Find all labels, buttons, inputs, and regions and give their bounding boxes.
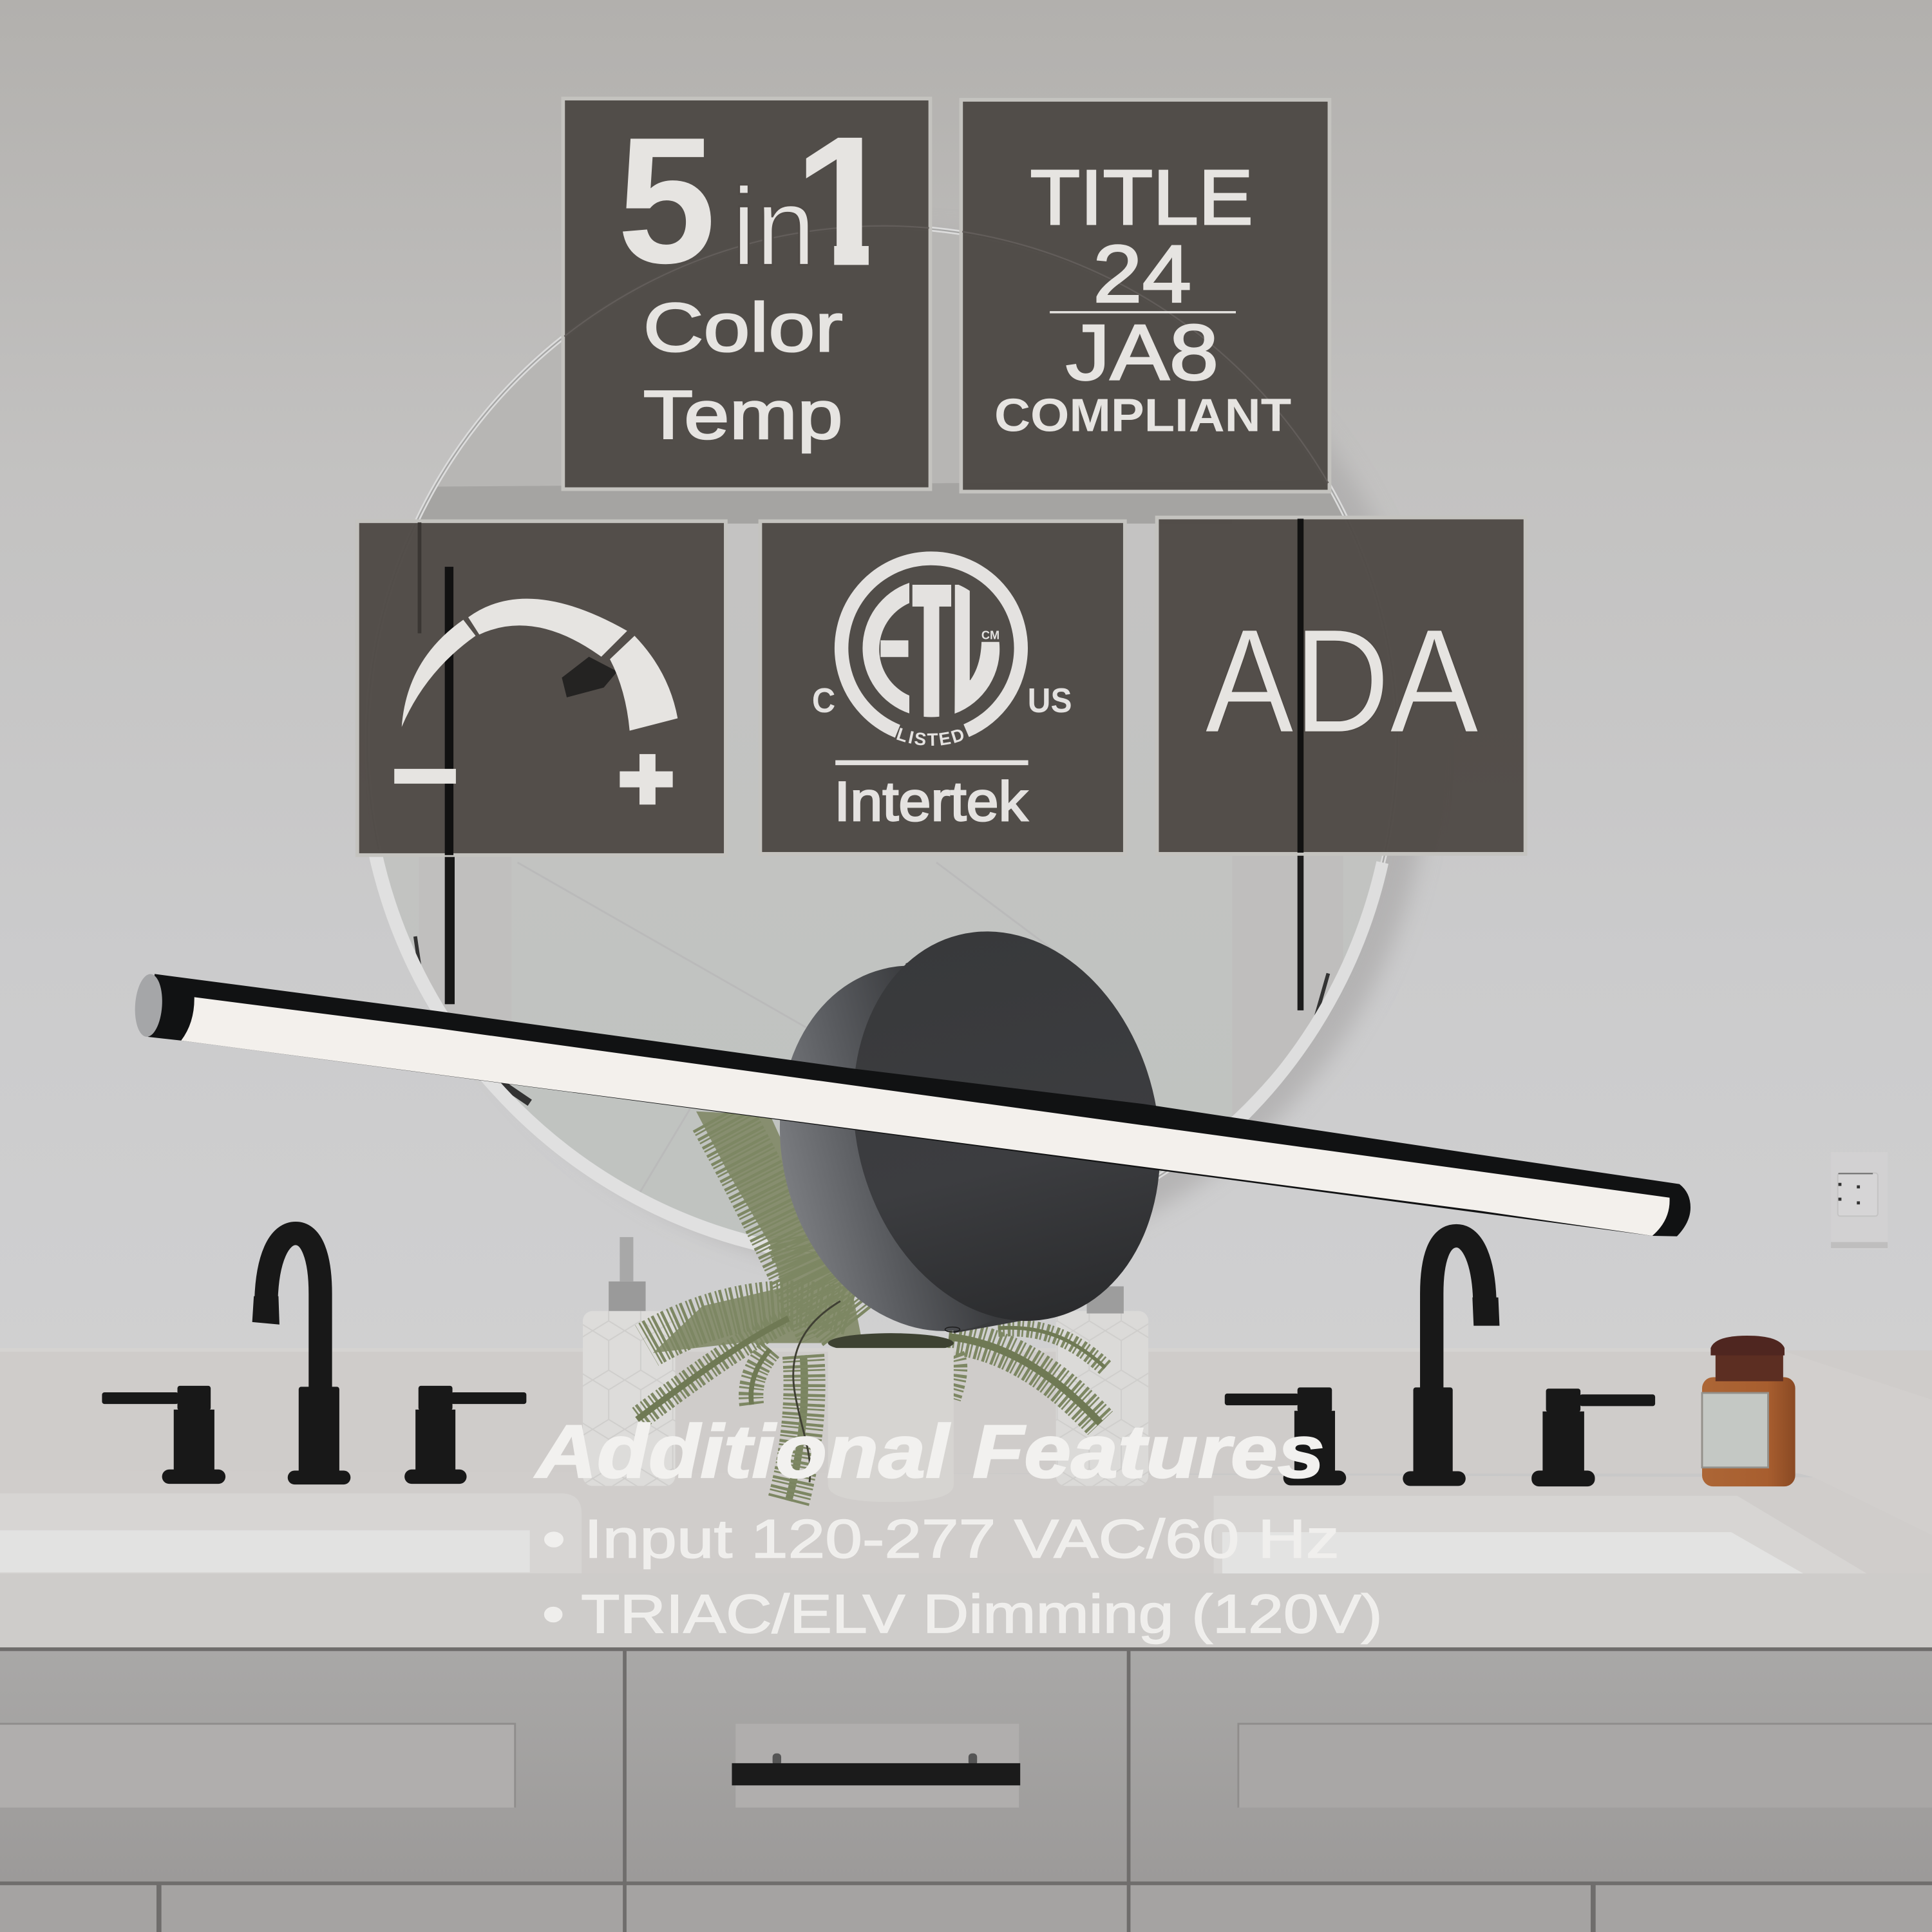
icon: ETL listed mark: C (812, 682, 835, 720)
color temp text: Color (643, 289, 843, 366)
panel: title 24 JA8 compliant (961, 100, 1329, 491)
wall outlet (1831, 1152, 1888, 1249)
fern plant: back fronds (637, 1112, 1105, 1423)
feature list (542, 1508, 1383, 1644)
drawer handle (732, 1754, 1020, 1785)
soap bottle left (583, 1237, 675, 1486)
title 24 JA8 text: COMPLIANT (994, 390, 1291, 442)
title 24 JA8 text: JA8 (1066, 308, 1218, 396)
panel: dimmable gauge (357, 521, 726, 855)
left faucet (102, 1233, 526, 1484)
right faucet (1225, 1236, 1655, 1486)
5 in 1 heading: 1 (793, 97, 896, 304)
Intertek wordmark: Intertek (834, 771, 1028, 833)
feature list: • TRIAC/ELV Dimming (120V) (542, 1584, 1383, 1644)
background: bathroom wall (0, 0, 1932, 1368)
color temp text: Temp (643, 376, 843, 453)
round wall mirror (345, 209, 1429, 1287)
icon: ETL listed mark: L (947, 543, 1013, 762)
icon: ETL listed mark: CM (981, 629, 999, 642)
panel: ADA (1157, 518, 1526, 854)
additional features heading: Additional Features (534, 1409, 1325, 1493)
color temp text (643, 289, 843, 453)
title 24 JA8 text: TITLE (1030, 154, 1253, 241)
cabinet (0, 1647, 1932, 1932)
ADA text: ADA (1205, 598, 1479, 763)
icon: ETL listed mark (812, 551, 1072, 746)
panel: ETL listed Intertek (759, 519, 1127, 853)
5 in 1 heading (623, 138, 869, 265)
lamp: round wall plate (742, 898, 1200, 1363)
planter pot (828, 1333, 954, 1502)
5 in 1 heading: in (732, 165, 816, 289)
title 24 JA8 text (994, 154, 1291, 442)
countertop (0, 1470, 1932, 1649)
amber jar (1702, 1336, 1795, 1486)
icon: ETL listed mark: LISTED (896, 728, 963, 746)
fern plant: hanging frond (788, 1301, 840, 1501)
lamp: light bar (133, 973, 1690, 1236)
feature list: • Input 120-277 VAC/60 Hz (542, 1508, 1340, 1569)
icon: ETL listed mark: US (1028, 682, 1072, 720)
panel: 5 in 1 color temp (563, 97, 931, 489)
icon: dimmer gauge (394, 599, 677, 804)
vanity backsplash (0, 1348, 1932, 1535)
icon: ETL listed mark: E (862, 543, 934, 762)
5 in 1 heading: 5 (618, 100, 716, 301)
soap bottle right (1056, 1286, 1148, 1486)
icon: ETL listed mark: T (898, 543, 965, 762)
title 24 JA8 text: 24 (1093, 229, 1191, 319)
